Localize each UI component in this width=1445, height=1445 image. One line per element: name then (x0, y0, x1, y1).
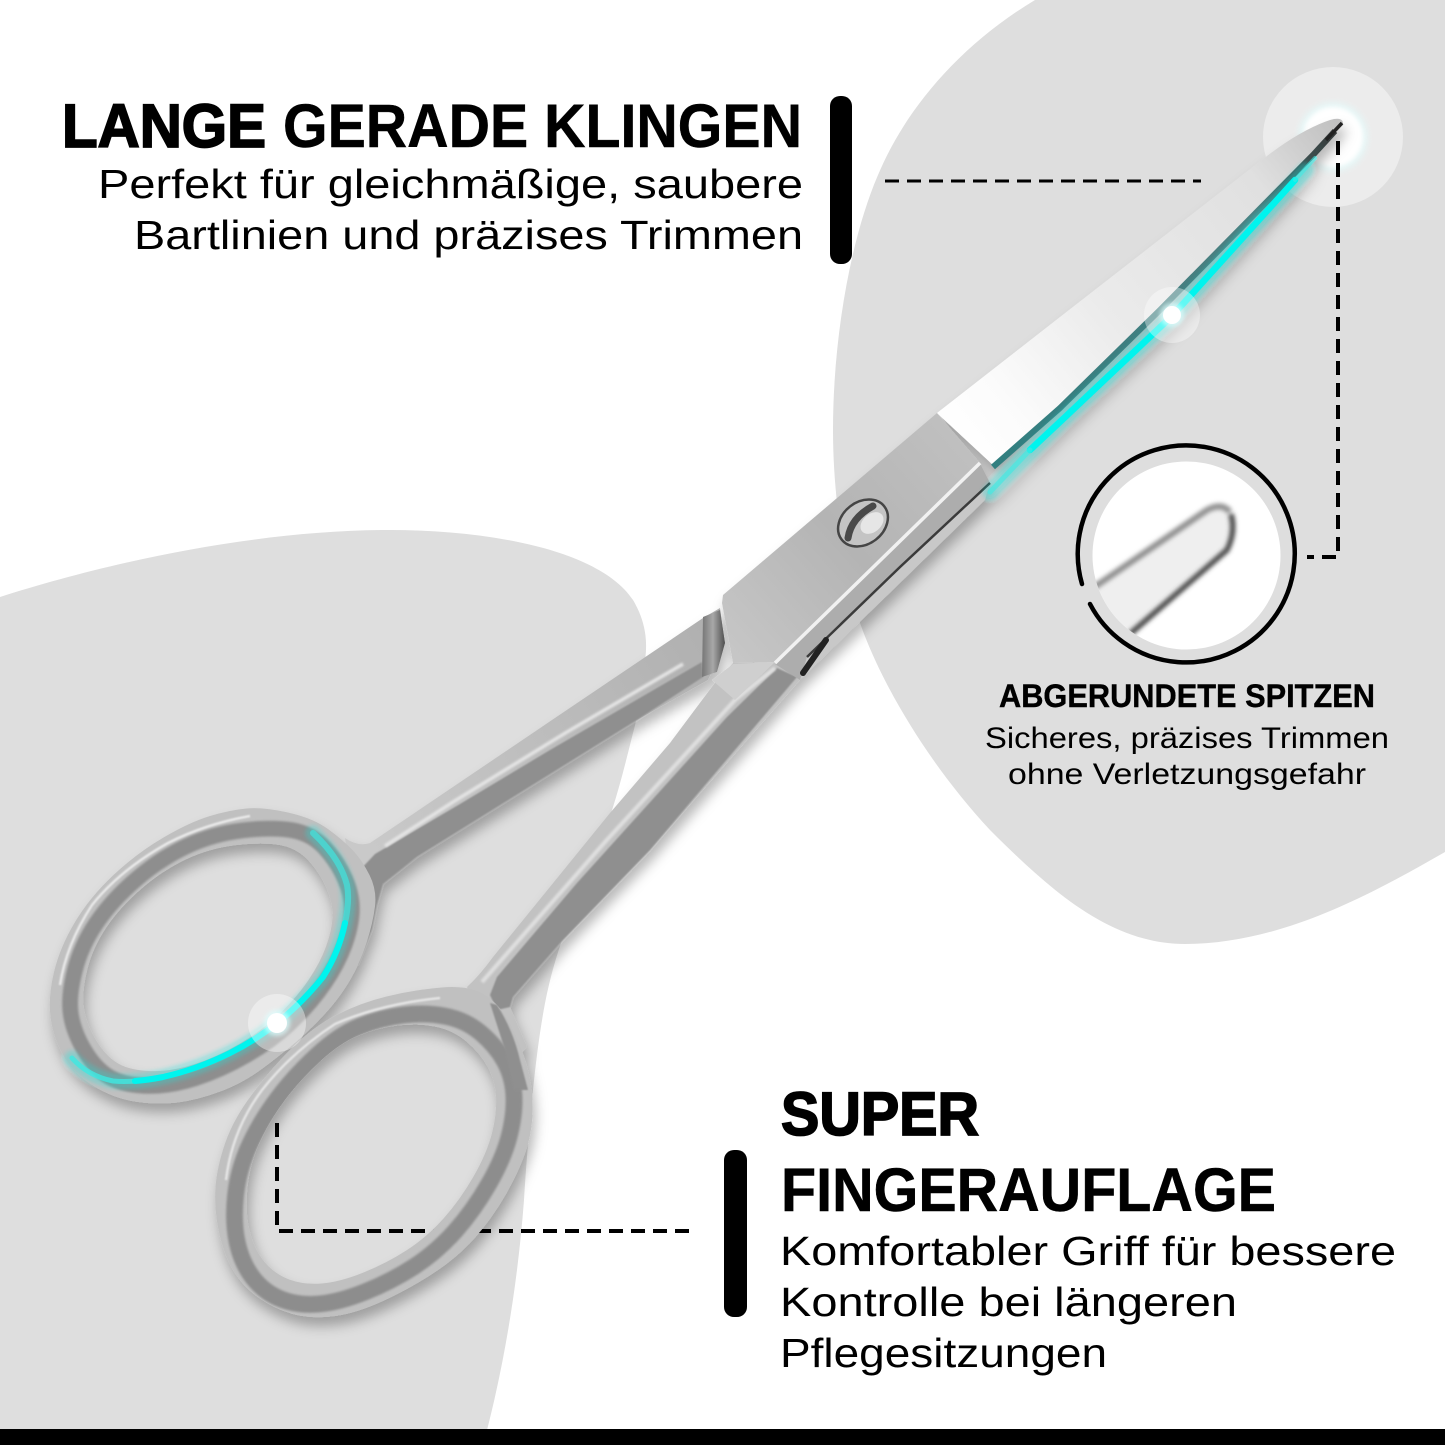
heading: super finger rest: FINGERAUFLAGE (781, 1156, 1276, 1224)
text block: blades description: Bartlinien und präzises Trimmen (134, 212, 803, 258)
text block: finger rest description (780, 1228, 1396, 1376)
lower shank (467, 663, 800, 1060)
scissors (50, 119, 1343, 1317)
dashed connector: finger rest (277, 1123, 693, 1231)
hinge shadow detail (702, 610, 725, 677)
pivot screw (829, 490, 897, 556)
highlight dot: blade edge (1144, 287, 1200, 343)
heading: super finger rest: SUPER (781, 1080, 979, 1148)
inset: rounded tip (1078, 445, 1295, 662)
heading: long straight blades: GERADE KLINGEN (283, 92, 802, 160)
blade (937, 119, 1343, 467)
heading: rounded tips: ABGERUNDETE SPITZEN (999, 678, 1375, 714)
text block: finger rest description: Pflegesitzungen (780, 1330, 1107, 1376)
heading accent bar: finger rest (724, 1150, 747, 1317)
heading accent bar: blades (830, 96, 852, 264)
finger ring 1 (50, 808, 375, 1104)
text block: rounded tips description: ohne Verletzungsgefahr (1008, 758, 1366, 791)
blob: top right (833, 0, 1445, 944)
bottom black bar (0, 1429, 1445, 1445)
text block: blades description (98, 161, 803, 258)
finger ring 2 (215, 987, 533, 1317)
upper shank (345, 608, 725, 965)
text block: finger rest description: Kontrolle bei längeren (780, 1279, 1237, 1325)
blob: bottom left (0, 530, 646, 1430)
heading: long straight blades: LANGE (62, 92, 266, 160)
highlight dot: ring (248, 994, 306, 1052)
teal highlight on blade (990, 158, 1315, 492)
text block: blades description: Perfekt für gleichmäßige, saubere (98, 161, 803, 207)
dashed connector: blade heading (885, 180, 1201, 182)
dashed connector: blade tip to inset (1307, 141, 1338, 557)
highlight: blade tip halo (1263, 67, 1403, 207)
heading: long straight blades (62, 92, 802, 160)
text block: rounded tips description (985, 722, 1389, 791)
teal highlight on ring 1 (72, 833, 348, 1082)
text block: rounded tips description: Sicheres, präzises Trimmen (985, 722, 1389, 755)
heading: super finger rest (781, 1080, 1276, 1224)
text block: finger rest description: Komfortabler Griff für bessere (780, 1228, 1396, 1274)
pivot plate (712, 413, 990, 700)
